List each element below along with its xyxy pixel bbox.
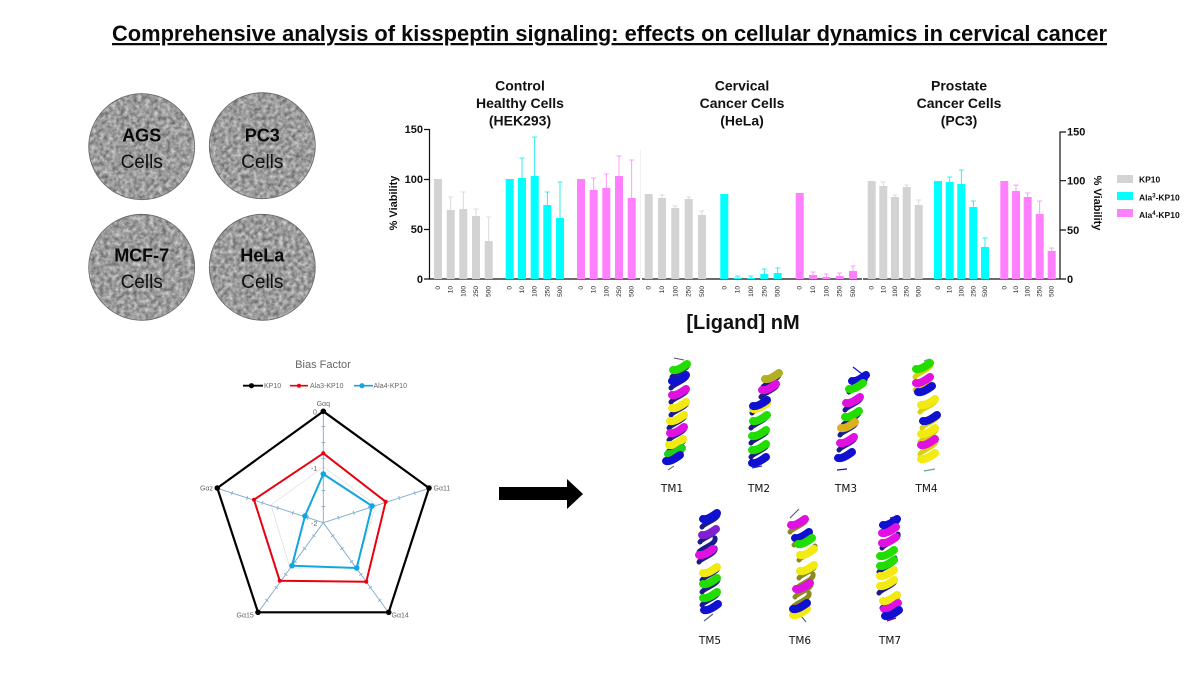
- radar labels: Gα11: [434, 486, 450, 492]
- helix TM1: TM1: [660, 483, 683, 495]
- radar grid: [271, 467, 376, 568]
- tick labels: concentrations: 500: [775, 286, 782, 297]
- heading: control: (HEK293): [489, 112, 551, 128]
- chart legend: KP10: [1139, 174, 1161, 184]
- right axis: 50: [1067, 225, 1079, 237]
- chart legend: [1117, 174, 1180, 220]
- tick labels: concentrations: 250: [761, 286, 768, 297]
- panel: cell lines: [89, 93, 315, 320]
- bar chart: viability: [388, 78, 1180, 334]
- radar legend: KP10: [264, 383, 281, 390]
- tick labels: concentrations: 500: [699, 286, 706, 297]
- heading: control: Healthy Cells: [476, 95, 564, 111]
- helix TM3: [834, 367, 866, 495]
- heading: prostate: Prostate: [931, 78, 987, 94]
- tick labels: concentrations: 10: [591, 286, 598, 293]
- tick labels: concentrations: 500: [486, 286, 493, 297]
- cell disc: HeLa: Cells: [241, 272, 283, 293]
- helix TM6: TM6: [788, 635, 811, 647]
- helix TM2: TM2: [747, 483, 770, 495]
- series: KP10: [214, 408, 432, 615]
- tick labels: concentrations: 250: [473, 286, 480, 297]
- heading: control: Control: [495, 78, 545, 94]
- tick labels: concentrations: 0: [578, 286, 585, 290]
- cell disc: MCF-7: [89, 214, 195, 320]
- right axis: % Viability: [1091, 176, 1103, 231]
- tick labels: concentrations: 0: [507, 286, 514, 290]
- tick labels: concentrations: 250: [544, 286, 551, 297]
- cell disc: PC3: [209, 93, 315, 199]
- tick labels: concentrations: 250: [616, 286, 623, 297]
- panel: transmembrane helices: [660, 358, 938, 647]
- chart legend: -KP10: [1156, 210, 1180, 220]
- series: Ala4-KP10: [289, 471, 375, 571]
- radar labels: -2: [311, 521, 317, 528]
- tick labels: concentrations: 100: [1025, 286, 1032, 297]
- helix TM4: TM4: [914, 483, 938, 495]
- heading: cervical: Cancer Cells: [700, 95, 785, 111]
- left axis: [388, 124, 430, 286]
- chart legend: Ala: [1139, 210, 1152, 220]
- right axis: 100: [1067, 176, 1085, 188]
- tick labels: concentrations: 10: [519, 286, 526, 293]
- tick labels: concentrations: [435, 286, 1056, 297]
- series: Ala3-KP10: [252, 451, 388, 584]
- radar legend: Ala3-KP10: [310, 383, 344, 390]
- cell disc: MCF-7: Cells: [121, 272, 163, 293]
- bars: KP10: [434, 179, 923, 279]
- tick labels: concentrations: 250: [686, 286, 693, 297]
- right axis: 150: [1067, 126, 1085, 138]
- helix TM2: [747, 373, 779, 495]
- x axis title: [Ligand] nM: [686, 312, 800, 334]
- cell disc: AGS: AGS: [122, 126, 161, 146]
- tick labels: concentrations: 0: [797, 286, 804, 290]
- tick labels: concentrations: 0: [935, 286, 942, 290]
- heading: cervical: Cervical: [715, 78, 769, 94]
- cell disc: MCF-7: MCF-7: [114, 246, 169, 266]
- tick labels: concentrations: 500: [629, 286, 636, 297]
- arrow: [499, 479, 583, 509]
- tick labels: concentrations: 10: [1013, 286, 1020, 293]
- cell disc: HeLa: HeLa: [240, 246, 285, 266]
- chart legend: 4: [1152, 211, 1156, 217]
- tick labels: concentrations: 100: [823, 286, 830, 297]
- helix TM3: TM3: [834, 483, 857, 495]
- tick labels: concentrations: 10: [659, 286, 666, 293]
- tick labels: concentrations: 0: [646, 286, 653, 290]
- heading: prostate: Cancer Cells: [917, 95, 1002, 111]
- cell disc: HeLa: [209, 214, 315, 320]
- tick labels: concentrations: 0: [1001, 286, 1008, 290]
- tick labels: concentrations: 500: [1049, 286, 1056, 297]
- heading: prostate: (PC3): [941, 112, 977, 128]
- cell disc: AGS: [89, 94, 195, 200]
- tick labels: concentrations: 500: [850, 286, 857, 297]
- bars: Ala4-KP10: [577, 176, 1056, 279]
- helix TM4: [914, 359, 938, 495]
- tick labels: concentrations: 10: [947, 286, 954, 293]
- right axis: [1060, 126, 1103, 286]
- helix TM7: [878, 516, 901, 647]
- helix TM5: [698, 513, 721, 647]
- helix TM6: [788, 509, 815, 647]
- radar labels: Gα15: [236, 612, 254, 620]
- tick labels: concentrations: 100: [958, 286, 965, 297]
- tick labels: concentrations: 0: [721, 286, 728, 290]
- tick labels: concentrations: 10: [880, 286, 887, 293]
- radar chart: bias factor: [200, 359, 450, 620]
- radar labels: [200, 401, 450, 620]
- tick labels: concentrations: 500: [982, 286, 989, 297]
- error bars: [448, 137, 1054, 278]
- tick labels: concentrations: 100: [603, 286, 610, 297]
- tick labels: concentrations: 250: [970, 286, 977, 297]
- helix TM1: [660, 358, 688, 495]
- title: Comprehensive analysis of kisspeptin signaling: effects on cellular dynamics in cervical cancer: [112, 21, 1107, 46]
- radar legend: [243, 383, 407, 390]
- tick labels: concentrations: 100: [532, 286, 539, 297]
- radar labels: Gαz: [200, 486, 213, 492]
- tick labels: concentrations: 10: [735, 286, 742, 293]
- chart legend: -KP10: [1156, 192, 1180, 202]
- tick labels: concentrations: 0: [435, 286, 442, 290]
- radar labels: -1: [311, 466, 317, 473]
- radar labels: Gα14: [392, 612, 409, 620]
- cell disc: PC3: PC3: [245, 126, 280, 146]
- chart legend: Ala: [1139, 192, 1152, 202]
- tick labels: concentrations: 250: [904, 286, 911, 297]
- tick labels: concentrations: 100: [672, 286, 679, 297]
- bars: Ala3-KP10: [506, 176, 989, 279]
- radar axes: [217, 411, 430, 614]
- heading: cervical: (HeLa): [720, 112, 764, 128]
- tick labels: concentrations: 100: [460, 286, 467, 297]
- tick labels: concentrations: 0: [869, 286, 876, 290]
- left axis: 100: [405, 174, 423, 186]
- right axis: 0: [1067, 274, 1073, 286]
- radar labels: 0: [313, 410, 317, 416]
- tick labels: concentrations: 10: [810, 286, 817, 293]
- tick labels: concentrations: 250: [1037, 286, 1044, 297]
- radar title: Bias Factor: [295, 359, 351, 371]
- helix TM5: TM5: [698, 635, 721, 647]
- chart legend: 3: [1152, 194, 1156, 200]
- cell disc: AGS: Cells: [121, 152, 163, 173]
- tick labels: concentrations: 100: [892, 286, 899, 297]
- tick labels: concentrations: 10: [448, 286, 455, 293]
- left axis: 50: [411, 224, 423, 236]
- tick labels: concentrations: 500: [557, 286, 564, 297]
- tick labels: concentrations: 250: [837, 286, 844, 297]
- cell disc: PC3: Cells: [241, 152, 283, 173]
- left axis: 0: [417, 274, 423, 286]
- left axis: 150: [405, 124, 423, 136]
- tick labels: concentrations: 100: [748, 286, 755, 297]
- baselines: [429, 278, 1060, 280]
- tick labels: concentrations: 500: [916, 286, 923, 297]
- helix TM7: TM7: [878, 635, 901, 647]
- radar labels: Gαq: [317, 401, 330, 408]
- radar legend: Ala4-KP10: [374, 383, 407, 390]
- left axis: % Viability: [388, 175, 400, 230]
